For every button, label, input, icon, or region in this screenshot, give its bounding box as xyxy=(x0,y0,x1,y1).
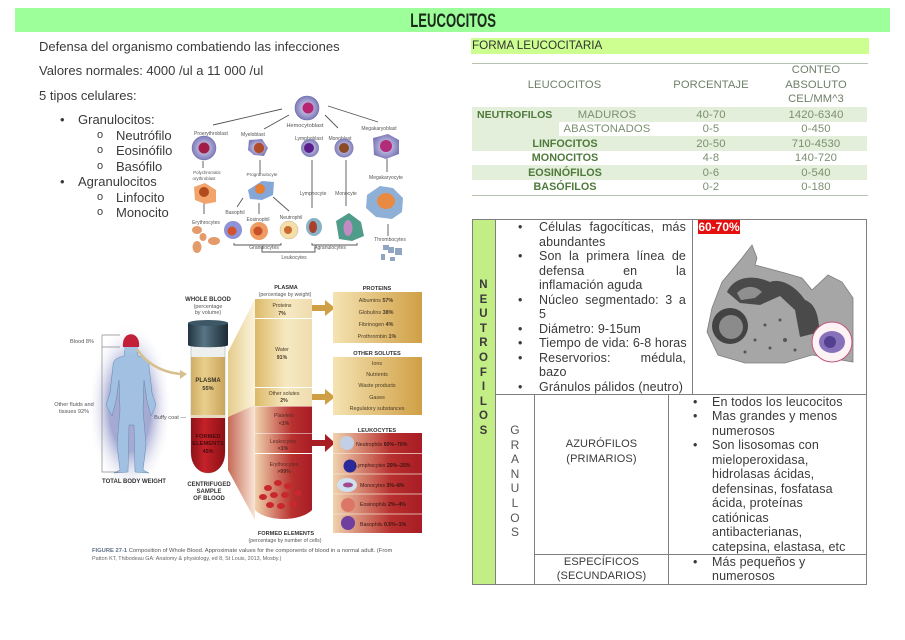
micrograph of neutrophil xyxy=(706,244,854,364)
percent column: 0-2 xyxy=(703,181,719,193)
absolute count column: 0-540 xyxy=(801,167,831,179)
azurofilos label xyxy=(566,437,637,464)
side label: neutrofilos: F xyxy=(480,367,487,379)
percent column: 0-6 xyxy=(703,167,719,179)
composition column: FORMED ELEMENTS xyxy=(258,531,314,537)
side label: neutrofilos: L xyxy=(480,396,487,408)
composition column: Leukocytes xyxy=(270,439,297,445)
myeloid and erythroid lineage: Erythrocytes xyxy=(192,220,220,226)
myeloid and erythroid lineage: Progranulocyte xyxy=(247,172,278,177)
leukocyte table: CONTEO xyxy=(792,64,840,76)
lymphoid and monocyte lineage: Leukocytes xyxy=(281,255,307,261)
row: basofilos: BASÓFILOS xyxy=(534,181,596,193)
agranulocitos list: o xyxy=(97,206,103,218)
azurofilos list: numerosos xyxy=(712,424,775,438)
blood tube: ELEMENTS xyxy=(192,441,224,447)
side label: neutrofilos: S xyxy=(480,425,487,437)
megakaryocyte lineage: Thrombocytes xyxy=(374,237,406,243)
neutrophil characteristics list: • xyxy=(518,350,522,364)
azurofilos list: catiónicas xyxy=(712,510,769,524)
especificos label xyxy=(557,555,646,582)
body silhouette: Blood 8% xyxy=(70,339,94,345)
azurofilos list xyxy=(693,394,846,554)
azurofilos list: catepsina, elastasa, etc xyxy=(712,540,846,554)
row: linfocitos: LINFOCITOS xyxy=(532,138,598,150)
azurofilos list: En todos los leucocitos xyxy=(712,394,843,408)
neutrophil characteristics list: defensa en la xyxy=(539,264,686,278)
leukocytes box: Eosinophils 2%–4% xyxy=(360,502,406,508)
proteins box: PROTEINS xyxy=(363,286,392,292)
proteins box xyxy=(333,286,422,343)
leukocytes box: Lymphocytes 20%–25% xyxy=(355,463,411,469)
composition column: <1% xyxy=(279,421,290,427)
lymphoid and monocyte lineage: Lymphocyte xyxy=(300,191,327,197)
agranulocitos list: • xyxy=(60,174,65,189)
other solutes box: Regulatory substances xyxy=(350,406,405,412)
composition column: 2% xyxy=(280,398,288,404)
leukocyte table xyxy=(472,63,868,196)
other solutes box xyxy=(333,351,422,415)
granulocitos list: o xyxy=(97,160,103,172)
myeloid and erythroid lineage: Proerythroblast xyxy=(194,131,229,137)
granulocitos list: o xyxy=(97,129,103,141)
neutrophil characteristics list: • xyxy=(518,380,522,394)
composition column: Erythrocytes xyxy=(270,462,299,468)
leukocyte table: PORCENTAJE xyxy=(673,79,749,91)
neutrophil characteristics list: • xyxy=(518,249,522,263)
especificos label: (SECUNDARIOS) xyxy=(557,570,646,582)
lymphoid and monocyte lineage: Lymphoblast xyxy=(295,136,324,142)
leukocytes box: Basophils 0.5%–1% xyxy=(360,522,407,528)
azurofilos list: Mas grandes y menos xyxy=(712,409,837,423)
myeloid and erythroid lineage: orythroblast xyxy=(193,176,216,181)
leukocytes box xyxy=(333,428,422,533)
blood tube: SAMPLE xyxy=(196,489,222,495)
neutrophil characteristics list: Células fagocíticas, más xyxy=(539,220,686,234)
leukocytes box: Monocytes 3%–8% xyxy=(360,483,405,489)
granulos side label: A xyxy=(511,452,519,466)
cell types heading: 5 tipos celulares: xyxy=(39,88,137,103)
neutrophil characteristics list: • xyxy=(518,220,522,234)
row: monocitos: MONOCITOS xyxy=(532,152,598,164)
leukocytes box: LEUKOCYTES xyxy=(358,428,396,434)
granulos side label: G xyxy=(510,423,520,437)
proteins box: Prothrombin 1% xyxy=(358,334,397,340)
agranulocitos list: o xyxy=(97,191,103,203)
blood tube: Buffy coat — xyxy=(154,415,186,421)
neutrophil characteristics list: Reservorios: médula, xyxy=(539,350,686,364)
absolute count column: 0-450 xyxy=(801,123,831,135)
especificos list: • xyxy=(693,554,698,568)
granulos side label: R xyxy=(511,438,519,452)
neutrophil characteristics list: Gránulos pálidos (neutro) xyxy=(539,380,683,394)
blood tube: FORMED xyxy=(195,434,221,440)
megakaryocyte lineage: Megakaryoblast xyxy=(361,126,397,132)
panel: forma leucocitaria xyxy=(471,38,869,196)
myeloid and erythroid lineage: Eosinophil xyxy=(246,217,270,223)
granulocitos list xyxy=(60,112,172,174)
granulos side label: N xyxy=(511,467,519,481)
figure caption xyxy=(92,548,392,562)
lymphoid and monocyte lineage: Monocyte xyxy=(335,191,357,197)
neutrophil characteristics list: • xyxy=(518,292,522,306)
lymphoid and monocyte lineage: Agranulocytes xyxy=(314,245,346,251)
absolute count column: 140-720 xyxy=(795,152,837,164)
neutrophil characteristics list: Son la primera línea de xyxy=(539,249,686,263)
absolute count column: 1420-6340 xyxy=(789,109,843,121)
green stripes xyxy=(472,107,867,122)
granulos side label xyxy=(510,423,520,539)
especificos list xyxy=(693,554,806,583)
definition: Defensa del organismo combatiendo las infecciones xyxy=(39,39,340,54)
composition column: Water xyxy=(275,347,289,353)
especificos list: Más pequeños y xyxy=(712,554,805,568)
especificos list: numerosos xyxy=(712,569,775,583)
title bar xyxy=(15,8,890,32)
other solutes box: Nutrients xyxy=(366,372,388,378)
side label: neutrofilos xyxy=(472,219,495,584)
section heading: FORMA LEUCOCITARIA xyxy=(472,39,602,52)
azurofilos list: • xyxy=(693,438,698,452)
section heading xyxy=(471,38,869,54)
intro text xyxy=(39,39,340,220)
composition column: 91% xyxy=(277,355,288,361)
proteins box: Globulins 38% xyxy=(359,310,394,316)
granulocitos list: Eosinófilo xyxy=(116,143,172,158)
composition column: Proteins xyxy=(272,303,292,309)
side label: neutrofilos: O xyxy=(479,352,488,364)
especificos label: ESPECÍFICOS xyxy=(564,556,639,568)
figure caption: FIGURE 27-1 Composition of Whole Blood. Approximate values for the components of blood in a normal adult. (From xyxy=(92,548,392,554)
agranulocitos list: Agranulocitos xyxy=(78,174,157,189)
percent column: 20-50 xyxy=(696,138,726,150)
blood tube: WHOLE BLOOD xyxy=(185,297,231,303)
side label: neutrofilos: T xyxy=(480,323,487,335)
composition column: Other solutes xyxy=(269,391,300,397)
azurofilos list: antibacterianas, xyxy=(712,525,802,539)
composition column: >99% xyxy=(277,469,291,475)
body silhouette: TOTAL BODY WEIGHT xyxy=(102,479,166,485)
arrows to detail boxes xyxy=(312,300,335,452)
other solutes box: OTHER SOLUTES xyxy=(353,351,401,357)
myeloid and erythroid lineage: Basophil xyxy=(225,210,245,216)
other solutes box: Ions xyxy=(372,361,382,367)
granulocitos list: Granulocitos: xyxy=(78,112,155,127)
neutrophil characteristics list: 5 xyxy=(539,307,546,321)
myeloid and erythroid lineage: Myeloblast xyxy=(241,132,266,138)
hemocytoblast xyxy=(286,96,324,129)
side label: neutrofilos: I xyxy=(482,381,485,393)
myeloid and erythroid lineage: Polychromatic xyxy=(193,170,222,175)
absolute count column: 710-4530 xyxy=(792,138,840,150)
granulocitos list: Basófilo xyxy=(116,159,162,174)
side label: neutrofilos: R xyxy=(479,337,488,349)
row: eosinofilos: EOSINÓFILOS xyxy=(528,167,602,179)
agranulocitos list: Monocito xyxy=(116,205,169,220)
granulos side label: O xyxy=(510,511,520,525)
hematopoiesis chart xyxy=(192,96,406,261)
composition column xyxy=(249,285,322,544)
azurofilos list: • xyxy=(693,394,698,408)
lymphoid and monocyte lineage xyxy=(249,136,364,261)
azurofilos list: • xyxy=(693,409,698,423)
side label: neutrofilos: O xyxy=(479,410,488,422)
blood tube: CENTRIFUGED xyxy=(187,482,231,488)
side label: neutrofilos: N xyxy=(479,279,488,291)
body silhouette xyxy=(54,322,187,494)
percent column: 4-8 xyxy=(703,152,719,164)
blood tube xyxy=(154,297,255,520)
azurofilos list: defensinas, fosfatasa xyxy=(712,482,833,496)
neutrophil characteristics list: Tiempo de vida: 6-8 horas xyxy=(539,336,687,350)
composition column: (percentage by number of cells) xyxy=(249,538,322,544)
neutrophil characteristics list: bazo xyxy=(539,365,567,379)
neutrophil characteristics list: • xyxy=(518,336,522,350)
normal values: Valores normales: 4000 /ul a 11 000 /ul xyxy=(39,63,263,78)
other solutes box: Waste products xyxy=(358,383,396,389)
azurofilos list: mieloperoxidasa, xyxy=(712,452,808,466)
leukocytes box: Neutrophils 60%–70% xyxy=(356,442,408,448)
row: neutrofilos: NEUTROFILOS xyxy=(477,109,552,121)
composition column: <1% xyxy=(278,446,289,452)
granulocitos list: o xyxy=(97,144,103,156)
blood tube: by volume) xyxy=(195,310,221,316)
myeloid and erythroid lineage: Neutrophil xyxy=(280,215,302,221)
percent column: 40-70 xyxy=(696,109,726,121)
myeloid and erythroid lineage xyxy=(192,131,302,253)
composition column: 7% xyxy=(278,311,286,317)
side label: neutrofilos: U xyxy=(479,308,488,320)
azurofilos label: AZURÓFILOS xyxy=(566,438,637,450)
blood tube: 55% xyxy=(202,386,214,392)
granulos side label: L xyxy=(512,496,518,510)
blood tube: PLASMA xyxy=(195,378,221,384)
granulos side label: S xyxy=(511,525,519,539)
leukocyte table: CEL/MM^3 xyxy=(788,93,844,105)
percentage badge: 60-70% xyxy=(698,220,740,234)
composition column: Platelets xyxy=(274,413,294,419)
granulocitos list: Neutrófilo xyxy=(116,128,172,143)
header row: LEUCOCITOS xyxy=(528,79,601,91)
proteins box: Albumins 57% xyxy=(359,298,393,304)
proteins box: Fibrinogen 4% xyxy=(359,322,394,328)
absolute count column xyxy=(789,109,843,193)
leukocyte table: ABSOLUTO xyxy=(785,79,847,91)
body silhouette: tissues 92% xyxy=(59,409,89,415)
neutrophil characteristics list: • xyxy=(518,322,522,336)
azurofilos label: (PRIMARIOS) xyxy=(566,452,637,464)
azurofilos list: ácida, proteínas xyxy=(712,496,803,510)
neutrophil characteristics list: Diámetro: 9-15um xyxy=(539,322,641,336)
panel: neutrofilos table xyxy=(472,219,867,585)
absolute count column: 0-180 xyxy=(801,181,831,193)
neutrophil characteristics list: abundantes xyxy=(539,234,606,248)
azurofilos list: Son lisosomas con xyxy=(712,438,819,452)
blood tube: 45% xyxy=(203,449,214,455)
composition column: (percentage by weight) xyxy=(259,292,312,298)
title: LEUCOCITOS xyxy=(411,11,496,32)
percent column: 0-5 xyxy=(703,123,719,135)
granulocitos list: • xyxy=(60,112,65,127)
arrows xyxy=(203,106,388,252)
neutrophil characteristics list: Núcleo segmentado: 3 a xyxy=(539,292,686,306)
agranulocitos list: Linfocito xyxy=(116,190,164,205)
megakaryocyte lineage xyxy=(361,126,406,261)
neutrophil characteristics list xyxy=(518,220,687,394)
table grid xyxy=(472,219,867,585)
side label: neutrofilos: E xyxy=(480,294,487,306)
granulos side label: U xyxy=(511,481,519,495)
leukocyte table: ABASTONADOS xyxy=(564,123,650,135)
megakaryocyte lineage: Megakaryocyte xyxy=(369,175,403,181)
azurofilos list: hidrolasas ácidas, xyxy=(712,467,814,481)
body silhouette: Other fluids and xyxy=(54,402,94,408)
lymphoid and monocyte lineage: Monoblast xyxy=(328,136,352,142)
leukocyte table: MADUROS xyxy=(578,109,636,121)
composition column: PLASMA xyxy=(274,285,298,291)
hemocytoblast: Hemocytoblast xyxy=(286,123,324,129)
figure caption: Patton KT, Thibodeau GA: Anatomy & physiology, ed 8, St Louis, 2013, Mosby.) xyxy=(92,556,282,562)
neutrophil characteristics list: inflamación aguda xyxy=(539,278,642,292)
blood composition figure xyxy=(54,285,422,562)
blood tube: OF BLOOD xyxy=(193,496,225,502)
other solutes box: Gases xyxy=(369,395,385,401)
lymphoid and monocyte lineage: Granulocytes xyxy=(249,245,279,251)
blood tube: (percentage xyxy=(194,304,222,310)
percent column xyxy=(696,109,726,193)
agranulocitos list xyxy=(60,174,169,220)
